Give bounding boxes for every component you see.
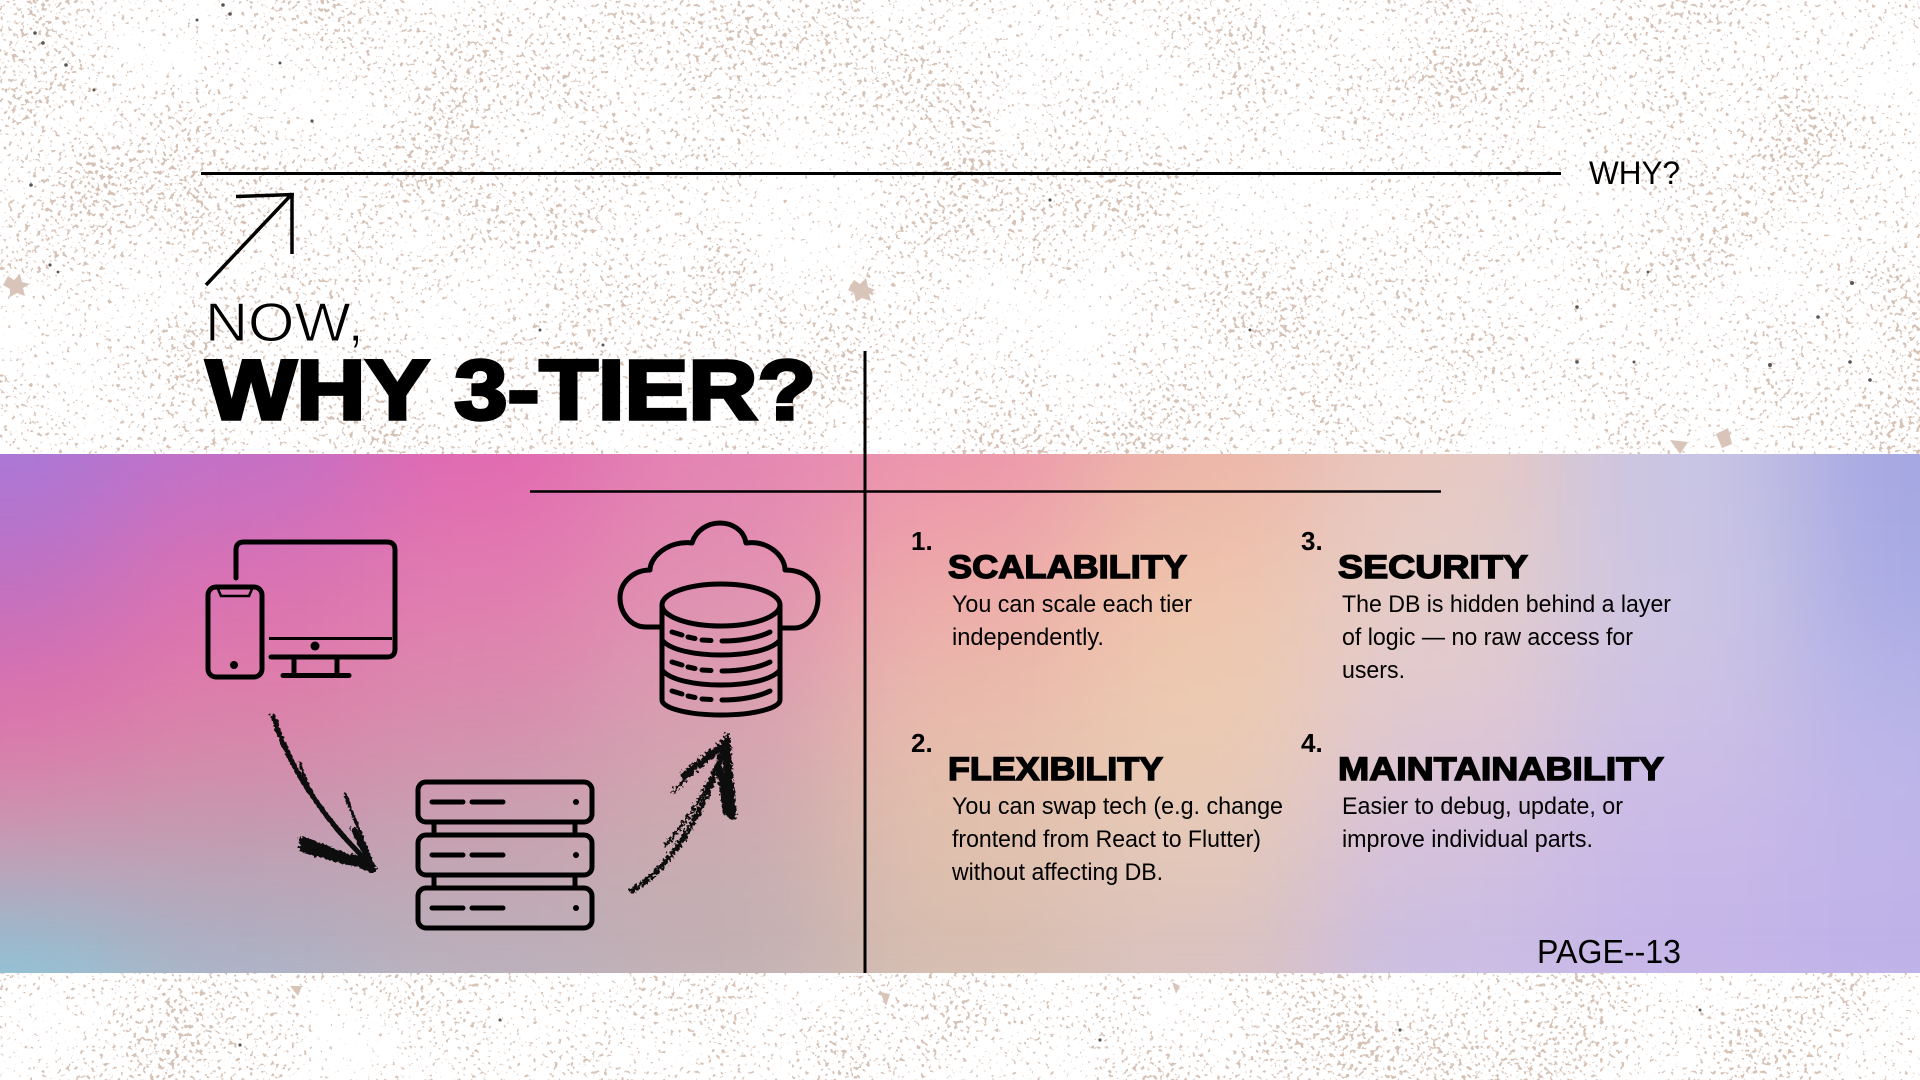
icon: application server [418,782,592,928]
item 3: security: The DB is hidden behind a layer [1342,591,1671,618]
gradient band [0,454,1920,973]
benefits list [911,526,1671,886]
item 1: scalability: SCALABILITY [948,549,1187,585]
item 4: maintainability: MAINTAINABILITY [1338,751,1664,787]
item 3: security: of logic — no raw access for [1342,624,1633,651]
item 4: maintainability: improve individual parts. [1342,826,1593,853]
item 1: scalability: independently. [952,624,1104,651]
item 2: flexibility: You can swap tech (e.g. change [952,793,1283,820]
section label: WHY?: WHY? [1589,155,1680,191]
item 1: scalability: You can scale each tier [952,591,1192,618]
item 1: scalability [911,526,1192,651]
item 3: security: users. [1342,657,1405,684]
page number: PAGE--13 [1537,933,1681,970]
item 4: maintainability: 4. [1301,728,1323,758]
arrow: server to database [632,735,732,891]
horizontal divider [530,490,1441,493]
vertical divider [864,351,866,973]
item 4: maintainability: Easier to debug, update, or [1342,793,1623,820]
arrow: client to server [273,716,374,868]
item 2: flexibility: FLEXIBILITY [948,751,1163,787]
title [205,291,816,437]
title: WHY 3-TIER?: WHY 3-TIER? [206,343,816,437]
item 2: flexibility: 2. [911,728,933,758]
item 4: maintainability [1301,728,1664,853]
item 1: scalability: 1. [911,526,933,556]
top rule [201,172,1561,175]
item 3: security: SECURITY [1338,549,1528,585]
item 2: flexibility [911,728,1283,886]
title: NOW,: NOW, [205,291,364,353]
item 3: security: 3. [1301,526,1323,556]
icon: monitor and phone [208,542,395,677]
icon: cloud database [620,523,818,715]
item 2: flexibility: without affecting DB. [951,859,1163,886]
item 3: security [1301,526,1671,684]
item 2: flexibility: frontend from React to Flutter) [952,826,1261,853]
architecture diagram [208,523,818,928]
icon: diagonal arrow [206,194,294,285]
